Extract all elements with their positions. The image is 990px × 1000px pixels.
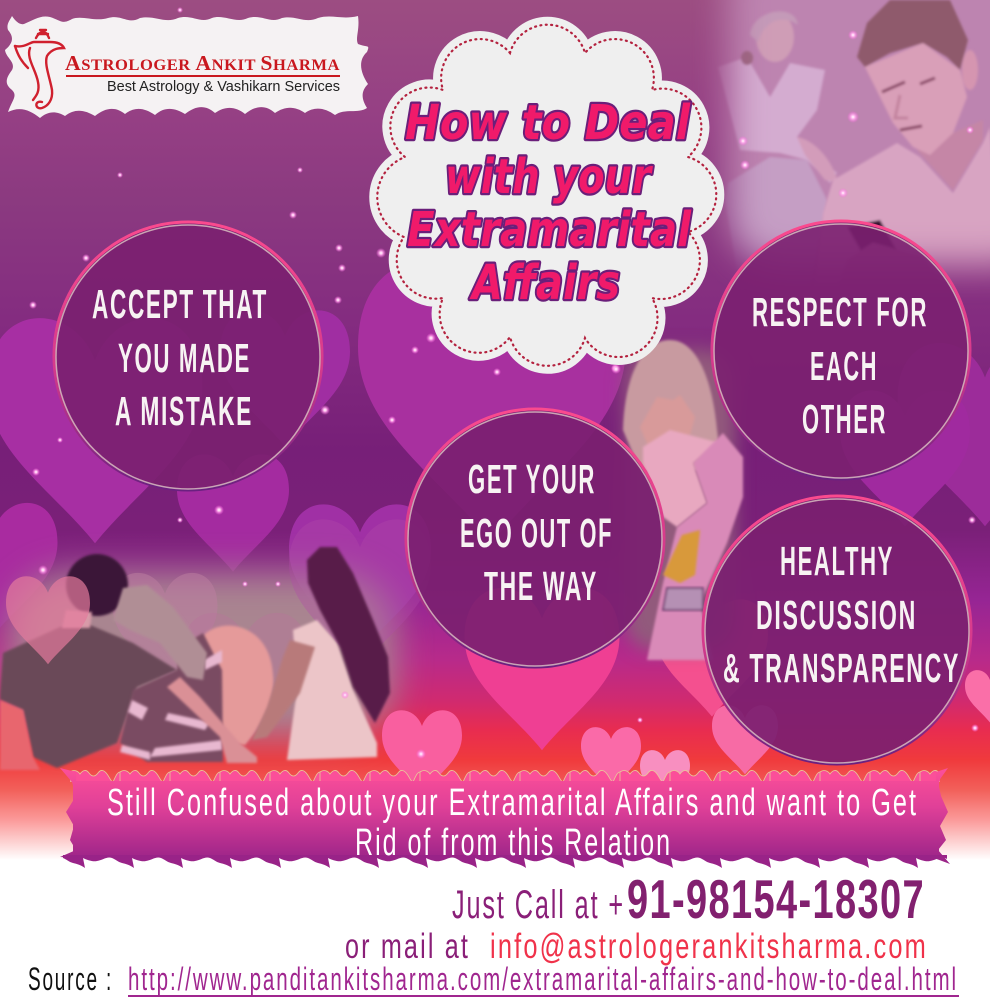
long dark hair [307, 547, 390, 723]
logo name: ASTROLOGER ANKIT SHARMA [65, 51, 340, 75]
dress orange patch [663, 530, 700, 583]
sparkles [29, 7, 979, 759]
man with phone [822, 0, 990, 276]
woman with striped shirt [120, 633, 223, 762]
dress pattern band [663, 588, 703, 610]
circle: respect for each other [712, 221, 970, 479]
hands [640, 395, 695, 450]
source line: Source : [28, 961, 113, 997]
title text: Affairs [469, 255, 620, 311]
banner [60, 768, 950, 870]
banner top fringe [70, 768, 940, 782]
photo: woman and man with phone [708, 0, 990, 290]
logo tagline: Best Astrology & Vashikarn Services [107, 79, 340, 95]
banner left fringe [60, 768, 78, 858]
shirt stripes [120, 650, 222, 760]
title text: How to Deal [405, 95, 690, 151]
arms [643, 430, 720, 527]
circle: healthy discussion and transparency: HEALTHY [780, 538, 894, 584]
dress [647, 433, 743, 660]
circle: get your ego out of the way: THE WAY [484, 563, 598, 609]
title text: with your [445, 149, 654, 205]
background hearts [0, 262, 990, 750]
man's other arm [0, 700, 40, 770]
circle: accept that you made a mistake: YOU MADE [118, 335, 251, 381]
blonde hair [113, 585, 207, 680]
circle: get your ego out of the way: GET YOUR [468, 456, 596, 502]
man from behind [0, 625, 177, 768]
man's arm and clasped hands [167, 677, 257, 763]
logo torn paper [5, 16, 368, 118]
banner bottom fringe [63, 855, 947, 870]
circle: get your ego out of the way [406, 409, 664, 667]
circle: accept that you made a mistake: A MISTAKE [115, 388, 253, 434]
circle: respect for each other: OTHER [802, 396, 887, 442]
photo backdrop [616, 342, 744, 656]
circle: get your ego out of the way: EGO OUT OF [460, 510, 613, 556]
banner body [73, 781, 939, 856]
call line [452, 868, 925, 930]
cloud dotted border [377, 25, 716, 366]
photo: couple and other woman [0, 520, 420, 771]
cloud shape [377, 25, 716, 366]
title cloud [377, 25, 716, 366]
mail line [345, 927, 928, 966]
woman with long dark hair shirt [287, 620, 377, 760]
circle: accept that you made a mistake [54, 222, 322, 490]
woman in background [719, 11, 838, 260]
logo rule [66, 75, 340, 77]
logo ganesh icon [15, 30, 64, 108]
circle: healthy discussion and transparency [703, 496, 971, 764]
photo haze [0, 548, 418, 758]
photo wall [708, 0, 990, 270]
hair [623, 340, 722, 470]
banner text line 2: Rid of from this Relation [355, 822, 672, 864]
photo: crying woman [616, 338, 746, 662]
mail line: or mail at [345, 927, 470, 966]
banner right fringe [934, 768, 950, 864]
lower pink hearts [6, 576, 990, 802]
title text: Extramarital [407, 202, 691, 258]
logo [5, 16, 368, 118]
her arm [252, 640, 315, 740]
circle: accept that you made a mistake: ACCEPT THAT [92, 281, 268, 327]
call line: Just Call at + [452, 883, 625, 927]
title text [405, 95, 691, 311]
translucent hearts over photo [112, 519, 431, 745]
circle: respect for each other: EACH [810, 343, 878, 389]
